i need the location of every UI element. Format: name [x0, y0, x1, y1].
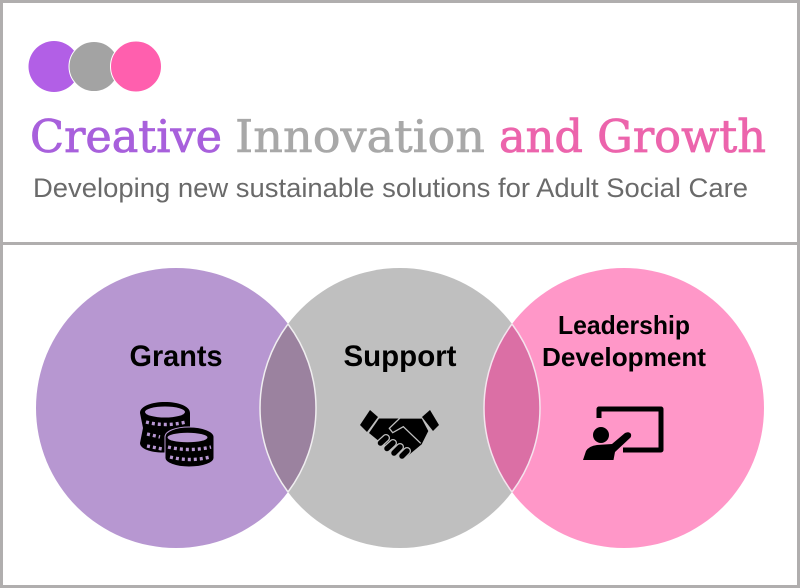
venn diagram	[36, 268, 764, 548]
title	[30, 110, 766, 163]
heading: grants: Grants	[130, 340, 222, 373]
circle: grants	[36, 268, 316, 548]
subtitle: Developing new sustainable solutions for Adult Social Care	[33, 173, 748, 203]
title: Innovation	[235, 110, 485, 163]
icon: handshake	[360, 410, 439, 457]
heading: leadership development: Development	[542, 342, 706, 372]
overlap: support and leadership	[484, 324, 540, 492]
circle: leadership development	[484, 268, 764, 548]
logo: three circles	[28, 41, 162, 92]
circle: support	[260, 268, 540, 548]
header panel	[28, 41, 766, 203]
heading: leadership development	[542, 310, 706, 372]
heading: support: Support	[344, 340, 457, 373]
title: Creative	[30, 110, 222, 163]
heading: leadership development: Leadership	[558, 310, 690, 340]
icon: presenter at board	[583, 409, 661, 460]
icon: coins	[140, 402, 214, 467]
title: and Growth	[499, 110, 766, 163]
overlap: grants and support	[260, 324, 316, 492]
